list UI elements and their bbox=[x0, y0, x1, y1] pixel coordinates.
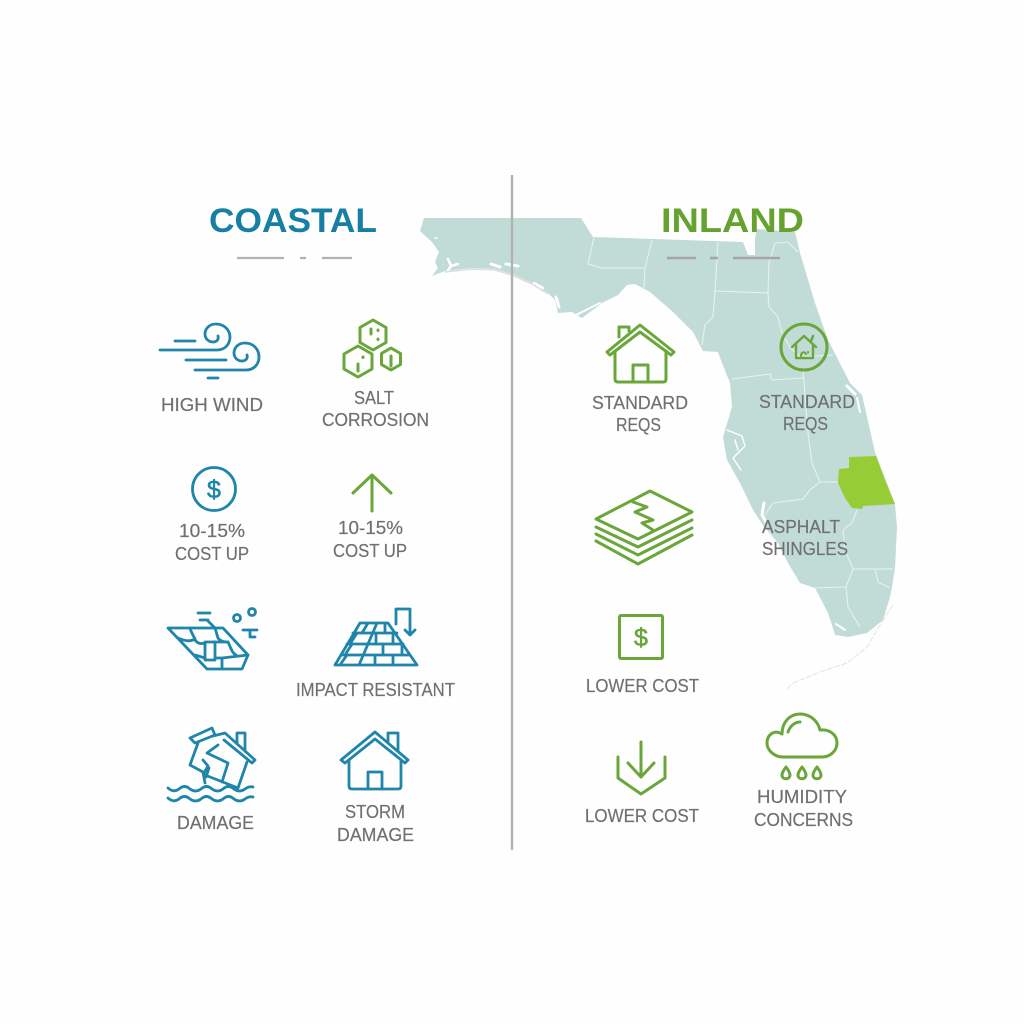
heading rule: coastal bbox=[237, 257, 352, 259]
label: COST UP bbox=[333, 541, 407, 561]
label: CONCERNS bbox=[754, 810, 853, 830]
label bbox=[762, 517, 848, 559]
label bbox=[337, 802, 414, 845]
label: 10-15% bbox=[338, 518, 403, 538]
label: STANDARD bbox=[759, 392, 855, 412]
heading: inland: INLAND bbox=[661, 202, 804, 240]
state shape bbox=[420, 218, 897, 637]
icon: house bbox=[341, 732, 408, 789]
icon: wind bbox=[160, 324, 259, 378]
icon: salt crystals bbox=[344, 320, 400, 377]
icon: dollar circle: $ bbox=[207, 476, 221, 504]
label: DAMAGE bbox=[337, 825, 414, 845]
label: LOWER COST bbox=[586, 676, 699, 696]
label: REQS bbox=[616, 415, 661, 435]
item: humidity concerns bbox=[754, 714, 853, 830]
item: impact resistant bbox=[296, 609, 455, 700]
heading rule: inland bbox=[667, 257, 780, 259]
label bbox=[759, 392, 855, 434]
label bbox=[175, 521, 249, 564]
label: CORROSION bbox=[322, 410, 429, 430]
label: SALT bbox=[354, 388, 394, 408]
item: salt corrosion bbox=[322, 320, 429, 430]
label: COST UP bbox=[175, 544, 249, 564]
icon: house bbox=[607, 325, 674, 382]
icon: damaged roof bbox=[168, 608, 257, 669]
icon: shingle stack bbox=[596, 491, 692, 564]
item: standard reqs left bbox=[592, 325, 688, 435]
label: ASPHALT bbox=[762, 517, 840, 537]
center divider bbox=[511, 175, 513, 850]
label: HIGH WIND bbox=[161, 395, 263, 415]
icon: up arrow bbox=[353, 475, 391, 511]
item: standard reqs right bbox=[759, 324, 855, 434]
label bbox=[754, 787, 853, 830]
bays and barrier islands bbox=[435, 238, 860, 630]
item: asphalt shingles bbox=[596, 491, 848, 564]
label: STORM bbox=[345, 802, 405, 822]
icon: house in circle bbox=[781, 324, 827, 370]
label: SHINGLES bbox=[762, 539, 848, 559]
item: storm damage bbox=[337, 732, 414, 845]
icon: rain cloud bbox=[767, 714, 837, 779]
item: high wind bbox=[160, 324, 263, 415]
heading: coastal: COASTAL bbox=[209, 202, 377, 240]
highlighted county bbox=[838, 456, 895, 509]
label bbox=[333, 518, 407, 561]
item: damage bbox=[168, 728, 255, 833]
label: IMPACT RESISTANT bbox=[296, 680, 455, 700]
icon: dollar square: $ bbox=[634, 624, 648, 652]
item: lower cost with dollar bbox=[586, 616, 699, 696]
item: lower cost with arrow bbox=[585, 742, 699, 826]
map of Florida bbox=[420, 218, 897, 689]
label: LOWER COST bbox=[585, 806, 699, 826]
item: coastal cost up with arrow bbox=[333, 475, 407, 561]
label: REQS bbox=[783, 414, 828, 434]
icon: flooded damaged house bbox=[168, 728, 255, 801]
label: HUMIDITY bbox=[757, 787, 847, 807]
item: coastal cost up with dollar bbox=[175, 468, 249, 564]
county lines bbox=[588, 237, 893, 627]
label bbox=[592, 393, 688, 435]
label bbox=[322, 388, 429, 430]
label: DAMAGE bbox=[177, 813, 254, 833]
icon: impact roof bbox=[335, 609, 417, 665]
label: 10-15% bbox=[179, 521, 245, 541]
icon: down arrow chevron bbox=[618, 742, 665, 794]
label: STANDARD bbox=[592, 393, 688, 413]
coast outline bbox=[445, 269, 548, 294]
florida keys bbox=[787, 605, 893, 689]
